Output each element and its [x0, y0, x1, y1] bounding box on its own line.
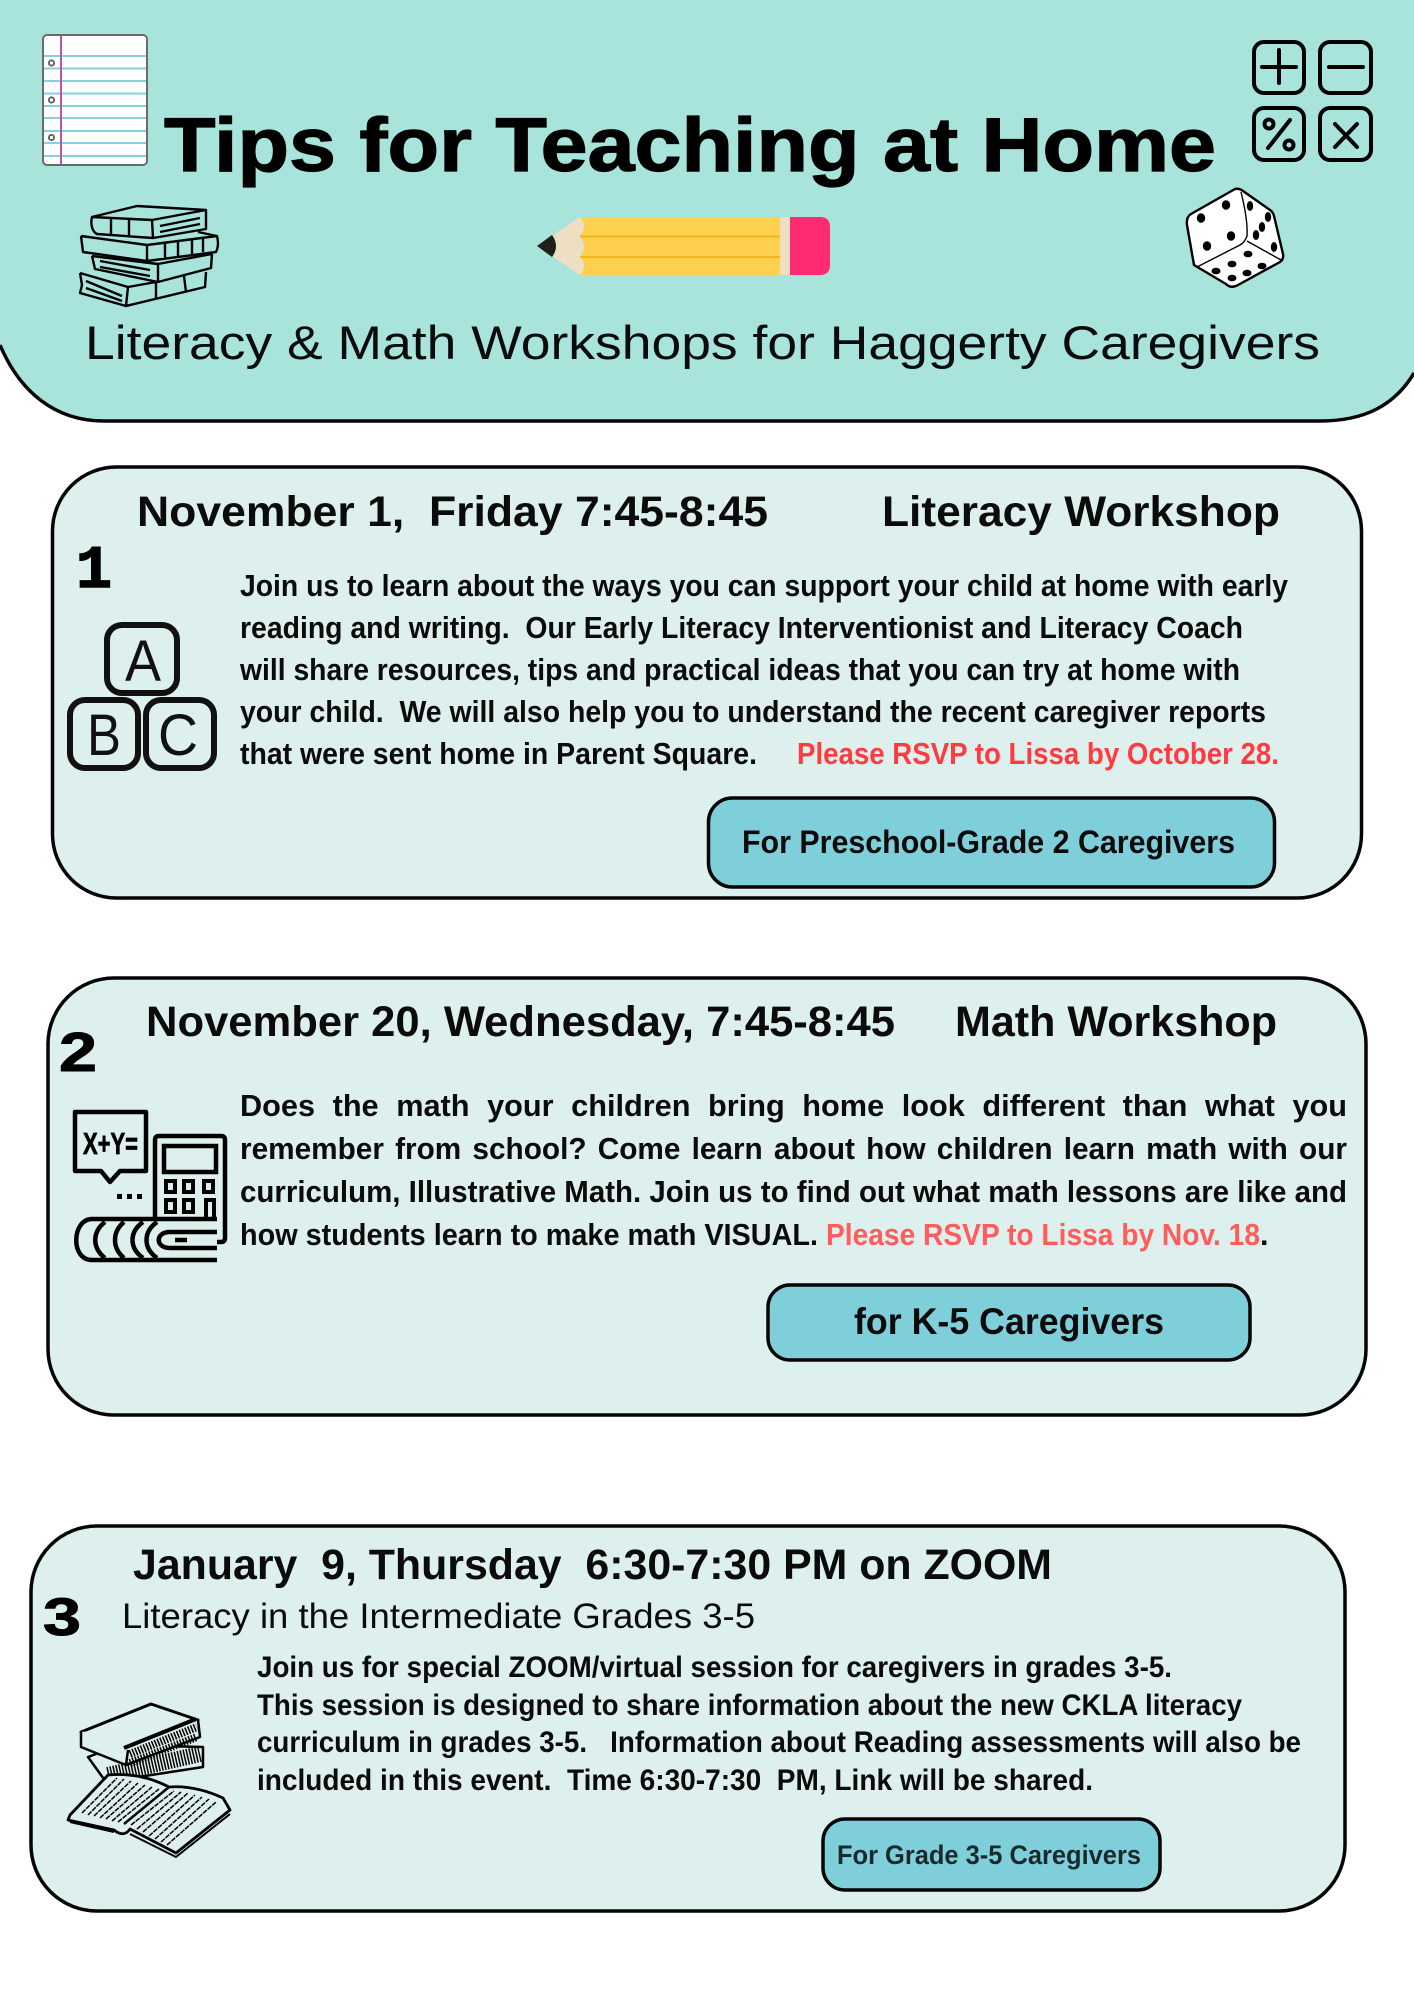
workshop 2 description: Does the math your children bring home look different than what you	[240, 1089, 1347, 1123]
subtitle: Literacy & Math Workshops for Haggerty Caregivers	[85, 316, 1320, 369]
icon: open book and stacked books	[68, 1704, 230, 1857]
icon: ABC blocks	[70, 625, 214, 768]
icon: calculator and book	[75, 1112, 225, 1260]
icon: ABC blocks: C	[158, 703, 198, 768]
panel: workshop 2 math	[48, 978, 1366, 1415]
workshop 1 description: Join us to learn about the ways you can support your child at home with early	[240, 569, 1288, 603]
header banner	[0, 0, 1414, 421]
workshop 3 date heading: January 9, Thursday 6:30-7:30 PM on ZOOM	[133, 1541, 1052, 1589]
workshop 1 description: that were sent home in Parent Square.	[240, 737, 757, 771]
workshop 2 date heading: November 20, Wednesday, 7:45-8:45	[146, 998, 895, 1046]
workshop 1 description: will share resources, tips and practical ideas that you can try at home with	[239, 653, 1240, 687]
workshop 2 type heading: Math Workshop	[955, 998, 1277, 1046]
workshop 1 description	[239, 569, 1288, 771]
icon: ABC blocks: B	[87, 703, 121, 768]
audience button 3: For Grade 3-5 Caregivers	[837, 1840, 1141, 1870]
workshop 1 RSVP note: Please RSVP to Lissa by October 28.	[797, 737, 1279, 771]
workshop 2 description	[240, 1089, 1347, 1252]
panel: workshop 3 zoom	[31, 1526, 1345, 1911]
icon: notebook paper	[43, 35, 147, 165]
workshop 3 description: Join us for special ZOOM/virtual session for caregivers in grades 3-5.	[257, 1651, 1172, 1684]
workshop 2 description: remember from school? Come learn about how children learn math with our	[240, 1132, 1347, 1166]
panel: workshop 1 literacy	[52, 467, 1362, 898]
audience button 2: for K-5 Caregivers	[854, 1301, 1164, 1342]
number 3: 3	[43, 1588, 81, 1647]
workshop 2 description: how students learn to make math VISUAL.	[240, 1218, 818, 1252]
workshop 3 description: This session is designed to share information about the new CKLA literacy	[257, 1689, 1243, 1722]
title: Tips for Teaching at Home	[164, 103, 1216, 188]
icon: math operator keys	[1254, 42, 1371, 160]
audience button 1	[708, 798, 1274, 887]
number 1: 1	[76, 538, 112, 606]
workshop 2 description: curriculum, Illustrative Math. Join us to find out what math lessons are like and	[240, 1175, 1347, 1209]
audience button 2	[768, 1285, 1250, 1360]
audience button 1: For Preschool-Grade 2 Caregivers	[742, 824, 1235, 860]
icon: stack of books	[80, 206, 218, 306]
workshop 1 description: reading and writing. Our Early Literacy Interventionist and Literacy Coach	[240, 611, 1243, 645]
workshop 3 subtitle: Literacy in the Intermediate Grades 3-5	[122, 1597, 755, 1636]
icon: dice	[1187, 189, 1283, 287]
icon: calculator and book: X+Y=	[83, 1126, 138, 1161]
workshop 3 description	[257, 1651, 1301, 1797]
workshop 1 description: your child. We will also help you to understand the recent caregiver reports	[240, 695, 1266, 729]
workshop 1 type heading: Literacy Workshop	[882, 488, 1280, 536]
workshop 3 description: curriculum in grades 3-5. Information about Reading assessments will also be	[257, 1726, 1301, 1759]
number 2: 2	[59, 1021, 97, 1083]
icon: ABC blocks: A	[125, 629, 161, 694]
workshop 3 description: included in this event. Time 6:30-7:30 PM, Link will be shared.	[257, 1764, 1093, 1797]
icon: pencil	[537, 217, 830, 275]
workshop 2 RSVP note: Please RSVP to Lissa by Nov. 18	[826, 1218, 1260, 1252]
workshop 2 description: .	[1260, 1218, 1268, 1252]
audience button 3	[823, 1819, 1160, 1890]
workshop 1 date heading: November 1, Friday 7:45-8:45	[137, 488, 768, 536]
